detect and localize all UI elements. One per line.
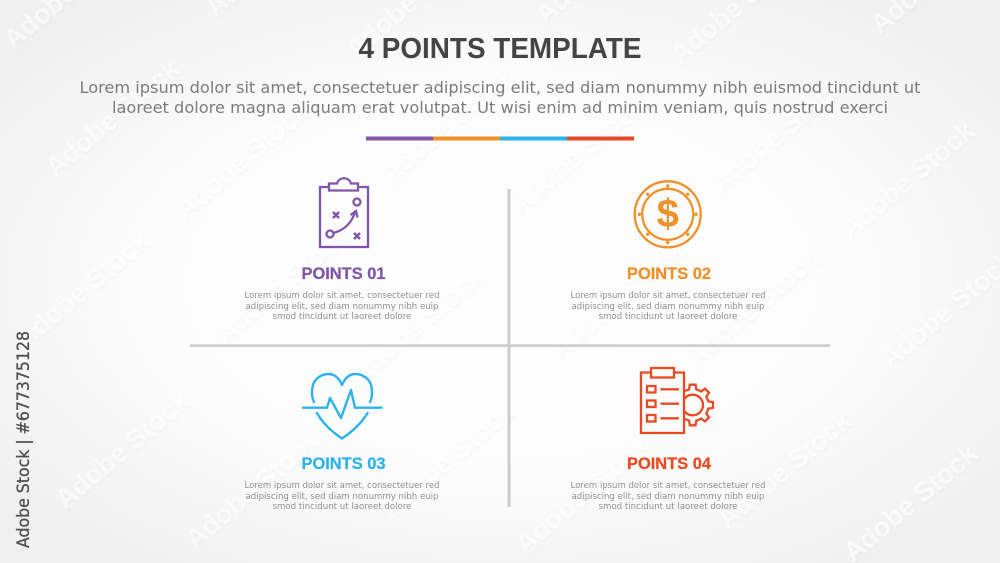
heading: points 04: POINTS 04: [627, 455, 712, 473]
text block: points 02: [570, 291, 766, 322]
text block: points 04: Lorem ipsum dolor sit amet, consectetuer red: [570, 481, 766, 491]
stock watermark pattern: Adobe Stock: [345, 260, 491, 390]
stock watermark pattern: Adobe Stock: [680, 243, 826, 373]
stock watermark pattern: Adobe Stock: [40, 53, 186, 183]
stock watermark pattern: Adobe Stock: [10, 225, 156, 355]
stock watermark pattern: Adobe Stock: [50, 385, 196, 515]
text block: points 03: [244, 481, 440, 512]
panel: points 01: [244, 178, 440, 322]
heading: points 01: POINTS 01: [302, 265, 386, 283]
stock watermark pattern: Adobe Stock: [180, 425, 326, 555]
stock watermark pattern: Adobe Stock: [545, 235, 691, 365]
text block: points 03: adipiscing elit, sed diam nonummy nibh euip: [246, 492, 439, 502]
icon: heart with pulse: [303, 374, 382, 438]
icon: dollar coin: [635, 181, 701, 247]
stock watermark pattern: Adobe Stock: [375, 60, 521, 190]
panel: points 03: [244, 374, 440, 512]
panel: points 04: [570, 368, 766, 512]
panel: points 02: [570, 181, 766, 322]
text block: points 01: smod tincidunt ut laoreet dolore: [272, 312, 412, 322]
text block: points 04: adipiscing elit, sed diam nonummy nibh euip: [572, 492, 765, 502]
stock watermark pattern: Adobe Stock: [835, 115, 981, 245]
icon: dollar coin: $: [657, 192, 679, 236]
stock id side label: Adobe Stock | #677375128: [14, 331, 34, 548]
text block: points 02: adipiscing elit, sed diam nonummy nibh euip: [572, 302, 765, 312]
text block: points 03: Lorem ipsum dolor sit amet, consectetuer red: [244, 481, 440, 491]
title: 4 POINTS TEMPLATE: [358, 33, 642, 65]
text block: points 04: [570, 481, 766, 512]
quadrant cross divider: [190, 189, 830, 507]
stock watermark pattern: Adobe Stock: [705, 70, 851, 200]
colour bar divider: [366, 136, 634, 140]
text block: points 03: smod tincidunt ut laoreet dolore: [272, 502, 412, 512]
stock watermark pattern: Adobe Stock: [510, 430, 656, 560]
heading: points 03: POINTS 03: [302, 455, 386, 473]
stock watermark pattern: Adobe Stock: [505, 90, 651, 220]
icon: clipboard strategy: [320, 178, 368, 247]
icon: checklist with gear: [641, 368, 713, 433]
text block: points 02: Lorem ipsum dolor sit amet, consectetuer red: [570, 291, 766, 301]
stock watermark pattern: Adobe Stock: [712, 405, 858, 535]
text block: points 01: [244, 291, 440, 322]
intro text: Lorem ipsum dolor sit amet, consectetuer adipiscing elit, sed diam nonummy nibh euismod tincidunt ut: [80, 78, 920, 97]
heading: points 02: POINTS 02: [627, 265, 711, 283]
intro text: laoreet dolore magna aliquam erat volutpat. Ut wisi enim ad minim veniam, quis nostrud exerci: [112, 98, 888, 117]
text block: points 04: smod tincidunt ut laoreet dolore: [598, 502, 738, 512]
text block: points 01: Lorem ipsum dolor sit amet, consectetuer red: [244, 291, 440, 301]
intro text: [80, 78, 920, 117]
stock watermark pattern: Adobe Stock: [170, 95, 316, 225]
text block: points 01: adipiscing elit, sed diam nonummy nibh euip: [246, 302, 439, 312]
stock watermark pattern: Adobe Stock: [375, 395, 521, 525]
text block: points 02: smod tincidunt ut laoreet dolore: [598, 312, 738, 322]
stock watermark pattern: Adobe Stock: [210, 220, 356, 350]
